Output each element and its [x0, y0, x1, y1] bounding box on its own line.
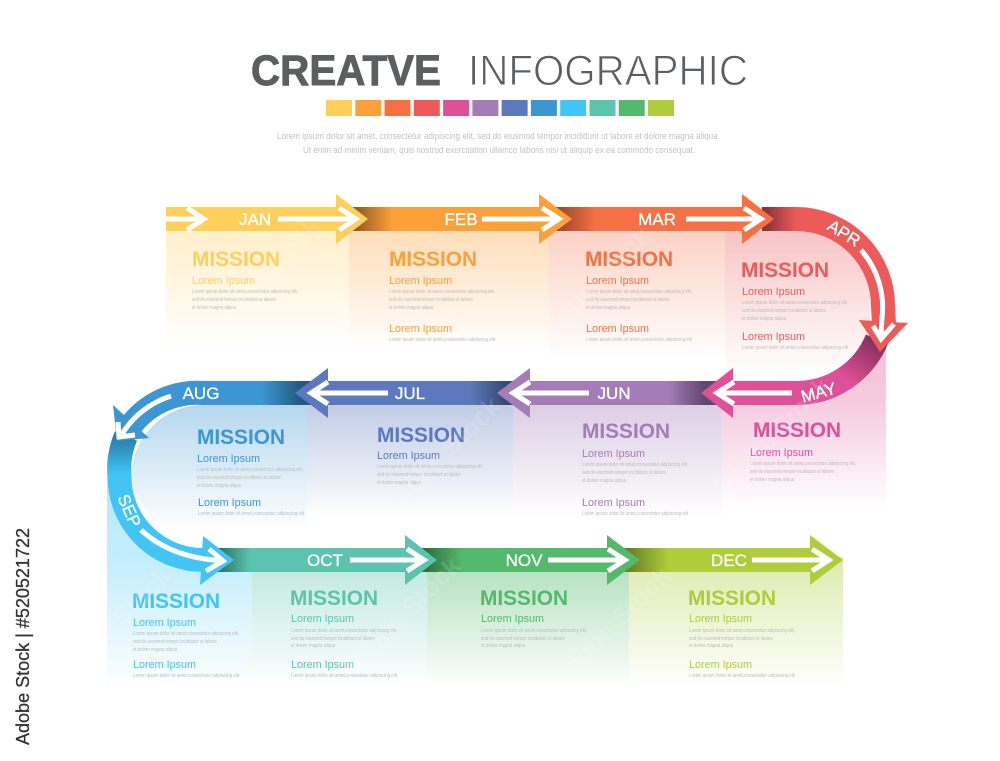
arrow: October [203, 535, 437, 585]
panel: November: sed do eiusmod tempor incididunt ut labore [481, 636, 565, 642]
panel: August: Lorem ipsum dolor sit amet,consectetur adipiscing elit, [197, 467, 303, 473]
arrow: May [701, 339, 877, 418]
panel: January: sed do eiusmod tempor incididunt ut labore [192, 297, 276, 303]
panel: November [427, 572, 629, 688]
arrow: September [113, 436, 234, 585]
panel: May: sed do eiusmod tempor incididunt ut labore [750, 469, 834, 475]
arrow: August: AUG [183, 384, 219, 403]
panel: June: Lorem ipsum dolor sit amet,consectetur adipiscing elit [582, 511, 688, 517]
panel: March: Lorem Ipsum [586, 323, 649, 335]
panel: May: et dolore magna aliqua [750, 477, 794, 483]
panel: February: Lorem Ipsum [389, 275, 452, 287]
panel: May: Lorem Ipsum [750, 447, 813, 459]
panel: December: sed do eiusmod tempor incididunt ut labore [689, 636, 773, 642]
panel: December: Lorem Ipsum [689, 659, 752, 671]
panel: June [513, 405, 722, 518]
panel: December: MISSION [688, 586, 776, 610]
arrow: February [349, 194, 572, 244]
intro text: Lorem ipsum dolor sit amet, consectetur adipiscing elit, sed do eiusmod tempor incididunt ut labore et dolore magna aliqua. [277, 131, 720, 141]
panel: September: Lorem ipsum dolor sit amet,consectetur adipiscing elit [133, 673, 239, 679]
panel: July [307, 405, 513, 518]
watermark [43, 210, 837, 694]
panel: December: et dolore magna aliqua [689, 643, 733, 649]
arrow: November: NOV [506, 551, 543, 570]
panel: August: Lorem ipsum dolor sit amet,consectetur adipiscing elit [198, 511, 304, 517]
panel: August: MISSION [197, 425, 285, 449]
watermark: Adobe Stock [703, 370, 837, 504]
panel: August: sed do eiusmod tempor incididunt ut labore [197, 475, 281, 481]
panel: March [549, 231, 725, 361]
panel: January: MISSION [192, 247, 280, 271]
panel: September: sed do eiusmod tempor incididunt ut labore [133, 639, 217, 645]
panel: April: sed do eiusmod tempor incididunt ut labore [742, 308, 826, 314]
panel: July: sed do eiusmod tempor incididunt ut labore [377, 472, 461, 478]
panel: September: et dolore magna aliqua [133, 647, 177, 653]
panel: July: Lorem Ipsum [377, 450, 440, 462]
panel: October [252, 572, 427, 688]
panel: July: Lorem ipsum dolor sit amet,consectetur adipiscing elit, [377, 464, 483, 470]
panel: October: Lorem Ipsum [291, 659, 354, 671]
panel: April: MISSION [741, 258, 829, 282]
panel: February: Lorem ipsum dolor sit amet,consectetur adipiscing elit [389, 337, 495, 343]
panel: May [722, 345, 886, 508]
panel: April: Lorem ipsum dolor sit amet,consectetur adipiscing elit, [742, 300, 848, 306]
panel: March: sed do eiusmod tempor incididunt ut labore [586, 297, 670, 303]
arrow: January: JAN [239, 210, 271, 229]
panel: September: Lorem Ipsum [133, 617, 196, 629]
panel: June: MISSION [582, 419, 670, 443]
panel: February: sed do eiusmod tempor incididunt ut labore [389, 297, 473, 303]
title: INFOGRAPHIC [468, 47, 748, 95]
arrow: June: JUN [597, 384, 631, 403]
panel: March: Lorem ipsum dolor sit amet,consectetur adipiscing elit [586, 337, 692, 343]
panel: August: Lorem Ipsum [198, 497, 261, 509]
panel: January: et dolore magna aliqua [192, 305, 236, 311]
watermark: Adobe Stock [523, 220, 657, 354]
panel: December: Lorem ipsum dolor sit amet,consectetur adipiscing elit, [689, 628, 795, 634]
panel: June: Lorem Ipsum [582, 448, 645, 460]
arrow: February: FEB [444, 210, 478, 229]
watermark: Adobe Stock [543, 560, 677, 694]
arrow: May: MAY [799, 379, 838, 406]
panel: July: MISSION [377, 423, 465, 447]
panel: October: Lorem ipsum dolor sit amet,consectetur adipiscing elit [291, 673, 397, 679]
watermark: Adobe Stock [43, 560, 177, 694]
panel: May: MISSION [753, 418, 841, 442]
panel: September: Lorem ipsum dolor sit amet,consectetur adipiscing elit, [133, 631, 239, 637]
panel: March: et dolore magna aliqua [586, 305, 630, 311]
arrow: January [166, 194, 368, 244]
title [251, 47, 748, 95]
panel: July: et dolore magna aliqua [377, 480, 421, 486]
arrow: December [607, 535, 843, 585]
panel: September: Lorem Ipsum [133, 659, 196, 671]
panel: April: Lorem Ipsum [742, 286, 805, 298]
arrow: April [762, 216, 908, 352]
panel: April: Lorem Ipsum [742, 331, 805, 343]
panel: February: et dolore magna aliqua [389, 305, 433, 311]
watermark: Adobe Stock [333, 550, 467, 684]
panel: August: et dolore magna aliqua [197, 483, 241, 489]
arrow: September: SEP [113, 491, 145, 530]
arrow: March: MAR [638, 210, 676, 229]
panel: March: MISSION [585, 247, 673, 271]
title: CREATVE [251, 47, 441, 95]
panel: December: Lorem Ipsum [689, 613, 752, 625]
watermark: Adobe Stock [193, 210, 327, 344]
panel: August: Lorem Ipsum [197, 453, 260, 465]
watermark: Adobe Stock [373, 390, 507, 524]
arrow: November [405, 535, 640, 585]
panel: December: Lorem ipsum dolor sit amet,consectetur adipiscing elit [689, 673, 795, 679]
arrow: April: APR [824, 216, 864, 251]
panel: February: Lorem ipsum dolor sit amet,consectetur adipiscing elit, [389, 289, 495, 295]
panel: December [629, 557, 843, 688]
panel: August [132, 405, 307, 530]
panel: February [349, 231, 549, 353]
panel: March: Lorem Ipsum [586, 275, 649, 287]
arrow: March [549, 194, 774, 244]
panel: February: Lorem Ipsum [389, 323, 452, 335]
panel: October: Lorem ipsum dolor sit amet,consectetur adipiscing elit, [291, 628, 397, 634]
panel: February: MISSION [389, 247, 477, 271]
stock id vertical text: Adobe Stock | #520521722 [13, 528, 33, 745]
panel: June: Lorem Ipsum [582, 497, 645, 509]
panel: November: Lorem ipsum dolor sit amet,consectetur adipiscing elit, [481, 628, 587, 634]
arrow: July [295, 368, 530, 418]
panel: November: Lorem Ipsum [481, 613, 544, 625]
panel: January: Lorem ipsum dolor sit amet,consectetur adipiscing elit, [192, 289, 298, 295]
arrow: August [113, 384, 328, 441]
arrow: December: DEC [711, 551, 747, 570]
panel: May: Lorem ipsum dolor sit amet,consectetur adipiscing elit, [750, 461, 856, 467]
panel: October: MISSION [290, 586, 378, 610]
panel: January [166, 231, 349, 353]
panel: April: Lorem ipsum dolor sit amet,consectetur adipiscing elit [742, 345, 848, 351]
colour swatches [326, 100, 674, 116]
arrow: July: JUL [395, 384, 425, 403]
panel: November: et dolore magna aliqua [481, 643, 525, 649]
panel: September [107, 445, 252, 688]
panel: March: Lorem ipsum dolor sit amet,consectetur adipiscing elit, [586, 289, 692, 295]
panel: April: et dolore magna aliqua [742, 316, 786, 322]
intro text: Ut enim ad minim veniam, quis nostrud exercitation ullamco laboris nisi ut aliquip ex ea commodo consequat. [303, 145, 695, 155]
panel: November: MISSION [480, 586, 568, 610]
panel: June: et dolore magna aliqua [582, 478, 626, 484]
panel: October: sed do eiusmod tempor incididunt ut labore [291, 636, 375, 642]
intro text [277, 131, 720, 155]
panel: October: et dolore magna aliqua [291, 643, 335, 649]
arrow: October: OCT [307, 551, 343, 570]
panel: June: sed do eiusmod tempor incididunt ut labore [582, 470, 666, 476]
panel: June: Lorem ipsum dolor sit amet,consectetur adipiscing elit, [582, 462, 688, 468]
arrow: June [497, 368, 733, 418]
panel: October: Lorem Ipsum [291, 613, 354, 625]
panel: January: Lorem Ipsum [192, 275, 255, 287]
panel: September: MISSION [132, 589, 220, 613]
panel: April [725, 231, 871, 381]
